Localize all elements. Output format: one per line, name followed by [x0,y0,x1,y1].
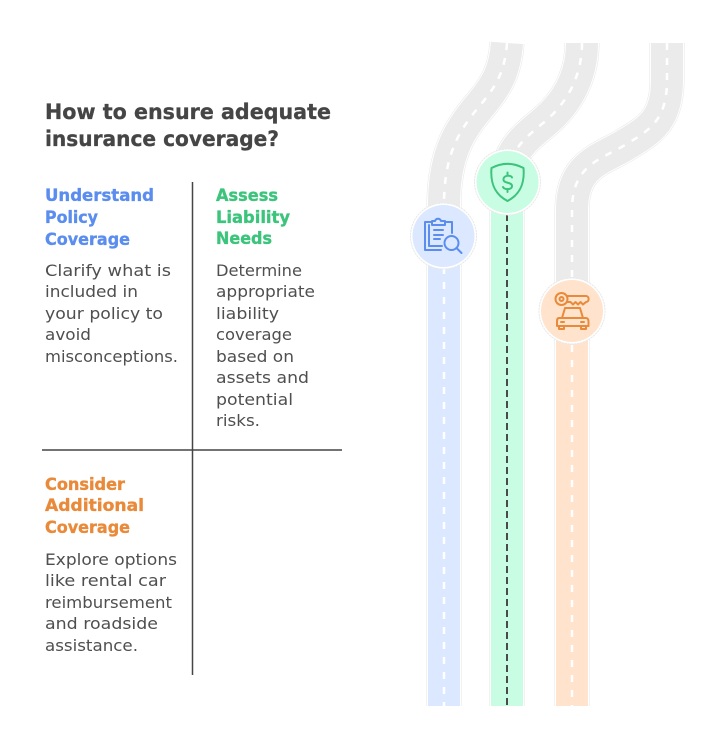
road: blue path [444,43,507,706]
heading: understand policy coverage: Understand [45,186,154,205]
text: understand policy coverage description: misconceptions. [45,347,178,366]
heading: understand policy coverage: Policy [45,208,98,227]
icon: shield with dollar sign [474,149,540,215]
text: assess liability needs description [216,261,315,430]
text: assess liability needs description: liability [216,304,279,323]
text: understand policy coverage description: your policy to [45,304,163,323]
icon: car with key [539,278,605,344]
text: understand policy coverage description [45,261,178,366]
heading: assess liability needs [216,186,290,248]
heading: assess liability needs: Assess [216,186,278,205]
text: understand policy coverage description: avoid [45,325,91,344]
text: assess liability needs description: coverage [216,325,292,344]
panel: understand policy coverage [45,186,178,366]
text: consider additional coverage description: Explore options [45,550,177,569]
title: How to ensure adequate [45,100,331,124]
road: green path [507,43,582,706]
text: assess liability needs description: assets and [216,368,309,387]
text: consider additional coverage description: reimbursement [45,593,172,612]
text: assess liability needs description: potential [216,390,293,409]
panel: consider additional coverage [45,475,177,655]
heading: assess liability needs: Needs [216,229,272,248]
text: assess liability needs description: Determine [216,261,302,280]
text: consider additional coverage description: like rental car [45,571,166,590]
heading: understand policy coverage [45,186,154,249]
text: understand policy coverage description: included in [45,282,138,301]
heading: consider additional coverage: Coverage [45,518,130,537]
heading: consider additional coverage: Additional [45,496,144,515]
heading: understand policy coverage: Coverage [45,230,130,249]
title [45,100,331,151]
panel: assess liability needs [216,186,315,430]
text: assess liability needs description: based on [216,347,294,366]
text: consider additional coverage description [45,550,177,655]
grid dividers [42,182,342,675]
heading: consider additional coverage: Consider [45,475,126,494]
text: understand policy coverage description: Clarify what is [45,261,171,280]
text: assess liability needs description: appropriate [216,282,315,301]
text: consider additional coverage description: and roadside [45,614,158,633]
title: insurance coverage? [45,127,279,151]
icon: clipboard with magnifier [410,203,476,269]
heading: assess liability needs: Liability [216,208,290,227]
road: orange path [572,43,667,706]
heading: consider additional coverage [45,475,144,537]
text: assess liability needs description: risks. [216,411,260,430]
text: consider additional coverage description: assistance. [45,636,138,655]
